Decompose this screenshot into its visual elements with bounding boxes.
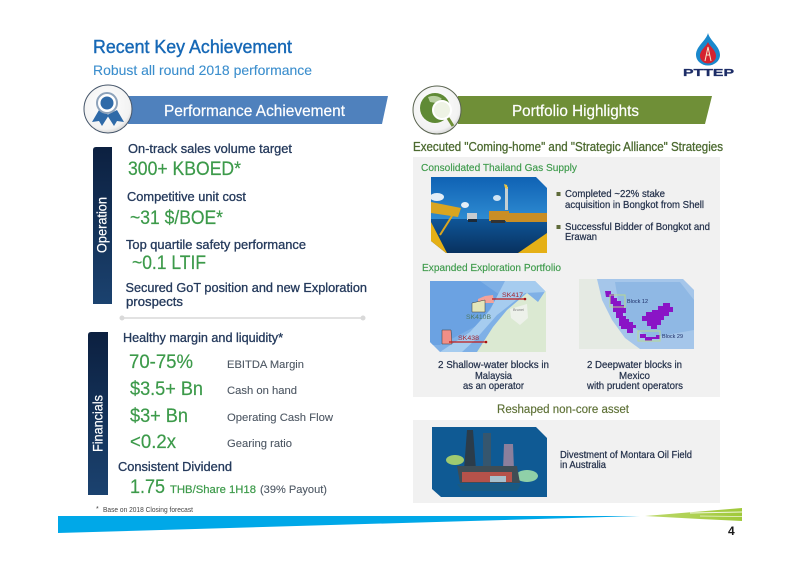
bullet: successful bidder: Erawan xyxy=(565,231,597,243)
exploration prospects xyxy=(126,281,367,309)
caption: Mexico: 2 Deepwater blocks in xyxy=(587,359,682,371)
panel: strategies background xyxy=(413,157,720,397)
metric: operating cash flow xyxy=(130,406,333,427)
bullet: Bongkot acquisition: Completed ~22% stake xyxy=(565,188,665,200)
caption: Mexico: Mexico xyxy=(619,370,650,382)
panel: financials xyxy=(88,331,333,498)
panel: performance achievement banner: Performance Achievement xyxy=(164,103,346,120)
metric: EBITDA margin: EBITDA Margin xyxy=(227,359,304,371)
text: Montara divestment: in Australia xyxy=(560,459,606,471)
metric: EBITDA margin xyxy=(129,352,304,373)
footer: green swoosh xyxy=(645,508,742,521)
caption: Mexico: with prudent operators xyxy=(586,380,683,392)
photo: Montara rig xyxy=(432,427,547,497)
panel: operation xyxy=(93,142,367,309)
metric: operating cash flow: Operating Cash Flow xyxy=(227,412,333,424)
heading: consistent dividend: Consistent Dividend xyxy=(118,460,232,474)
caption: Malaysia xyxy=(438,359,549,392)
panel: performance achievement banner xyxy=(128,96,388,124)
safety performance xyxy=(126,238,306,274)
financials side bar: Financials xyxy=(90,395,106,452)
icon: PTTEP logo xyxy=(683,33,734,79)
map: Malaysia blocks: Brunei xyxy=(513,307,524,312)
exploration prospects: Secured GoT position and new Exploration xyxy=(126,281,367,295)
bullet: successful bidder: Successful Bidder of Bongkot and xyxy=(565,221,710,233)
footer: blue swoosh xyxy=(58,516,640,533)
metric: cash on hand xyxy=(130,379,297,400)
caption: Malaysia: as an operator xyxy=(463,380,524,392)
unit cost: ~31 $/BOE* xyxy=(130,208,224,229)
metric: dividend xyxy=(130,477,327,498)
safety performance: ~0.1 LTIF xyxy=(132,253,206,274)
metric: dividend: (39% Payout) xyxy=(260,484,327,496)
icon: globe with magnifier xyxy=(413,86,461,134)
page number: 4 xyxy=(728,524,735,538)
metric: gearing ratio: Gearing ratio xyxy=(227,438,292,450)
text: Montara divestment xyxy=(560,449,692,471)
heading: Thailand gas supply: Consolidated Thailand Gas Supply xyxy=(421,162,578,174)
metric: EBITDA margin: 70-75% xyxy=(129,352,193,373)
caption: Malaysia: Malaysia xyxy=(475,370,512,382)
safety performance: Top quartile safety performance xyxy=(126,238,306,252)
icon: PTTEP logo: PTTEP xyxy=(683,67,734,79)
icon: award ribbon xyxy=(84,85,132,133)
metric: operating cash flow: $3+ Bn xyxy=(130,406,188,427)
map: Mexico blocks: Block 29 xyxy=(662,334,683,340)
bullet: Bongkot acquisition: acquisition in Bongkot from Shell xyxy=(565,199,704,211)
sales volume target xyxy=(128,142,293,180)
unit cost xyxy=(127,190,247,229)
financials side bar xyxy=(88,332,108,495)
footnote: * xyxy=(96,506,99,513)
footnote: Base on 2018 Closing forecast xyxy=(103,507,193,514)
caption: Mexico xyxy=(586,359,683,392)
text: Montara divestment: Divestment of Montara Oil Field xyxy=(560,449,692,461)
operation side bar xyxy=(93,147,112,304)
map: Mexico blocks: Block 12 xyxy=(627,299,648,305)
bullet: Bongkot acquisition xyxy=(556,188,704,211)
map: Malaysia blocks: SK438 xyxy=(458,335,479,342)
metric: dividend: THB/Share 1H18 xyxy=(170,484,256,496)
operation side bar: Operation xyxy=(94,197,110,253)
metric: cash on hand: $3.5+ Bn xyxy=(130,379,203,400)
sales volume target: 300+ KBOED* xyxy=(128,159,242,180)
heading: strategies: Executed "Coming-home" and "Strategic Alliance" Strategies xyxy=(413,140,723,154)
title: Recent Key Achievement xyxy=(93,37,292,57)
heading: healthy margin: Healthy margin and liquidity* xyxy=(123,331,283,345)
map: Malaysia blocks: SK410B xyxy=(466,314,491,321)
metric: cash on hand: Cash on hand xyxy=(227,385,297,397)
metric: dividend: 1.75 xyxy=(130,477,165,498)
panel: portfolio highlights banner xyxy=(458,96,712,124)
subtitle: Robust all round 2018 performance xyxy=(93,62,312,78)
heading: non-core asset: Reshaped non-core asset xyxy=(497,404,630,416)
caption: Malaysia: 2 Shallow-water blocks in xyxy=(438,359,549,371)
metric: gearing ratio xyxy=(130,432,292,453)
map: Mexico blocks xyxy=(579,279,694,349)
metric: gearing ratio: <0.2x xyxy=(130,432,176,453)
bullet: successful bidder xyxy=(556,221,710,243)
exploration prospects: prospects xyxy=(126,295,183,309)
heading: exploration portfolio: Expanded Exploration Portfolio xyxy=(422,262,561,274)
photo: offshore platform xyxy=(430,177,547,253)
panel: non-core asset xyxy=(413,420,720,503)
panel: portfolio highlights banner: Portfolio Highlights xyxy=(512,103,639,120)
sales volume target: On-track sales volume target xyxy=(128,142,293,156)
map: Malaysia blocks xyxy=(430,281,546,352)
unit cost: Competitive unit cost xyxy=(127,190,247,204)
map: Malaysia blocks: SK417 xyxy=(502,292,523,299)
